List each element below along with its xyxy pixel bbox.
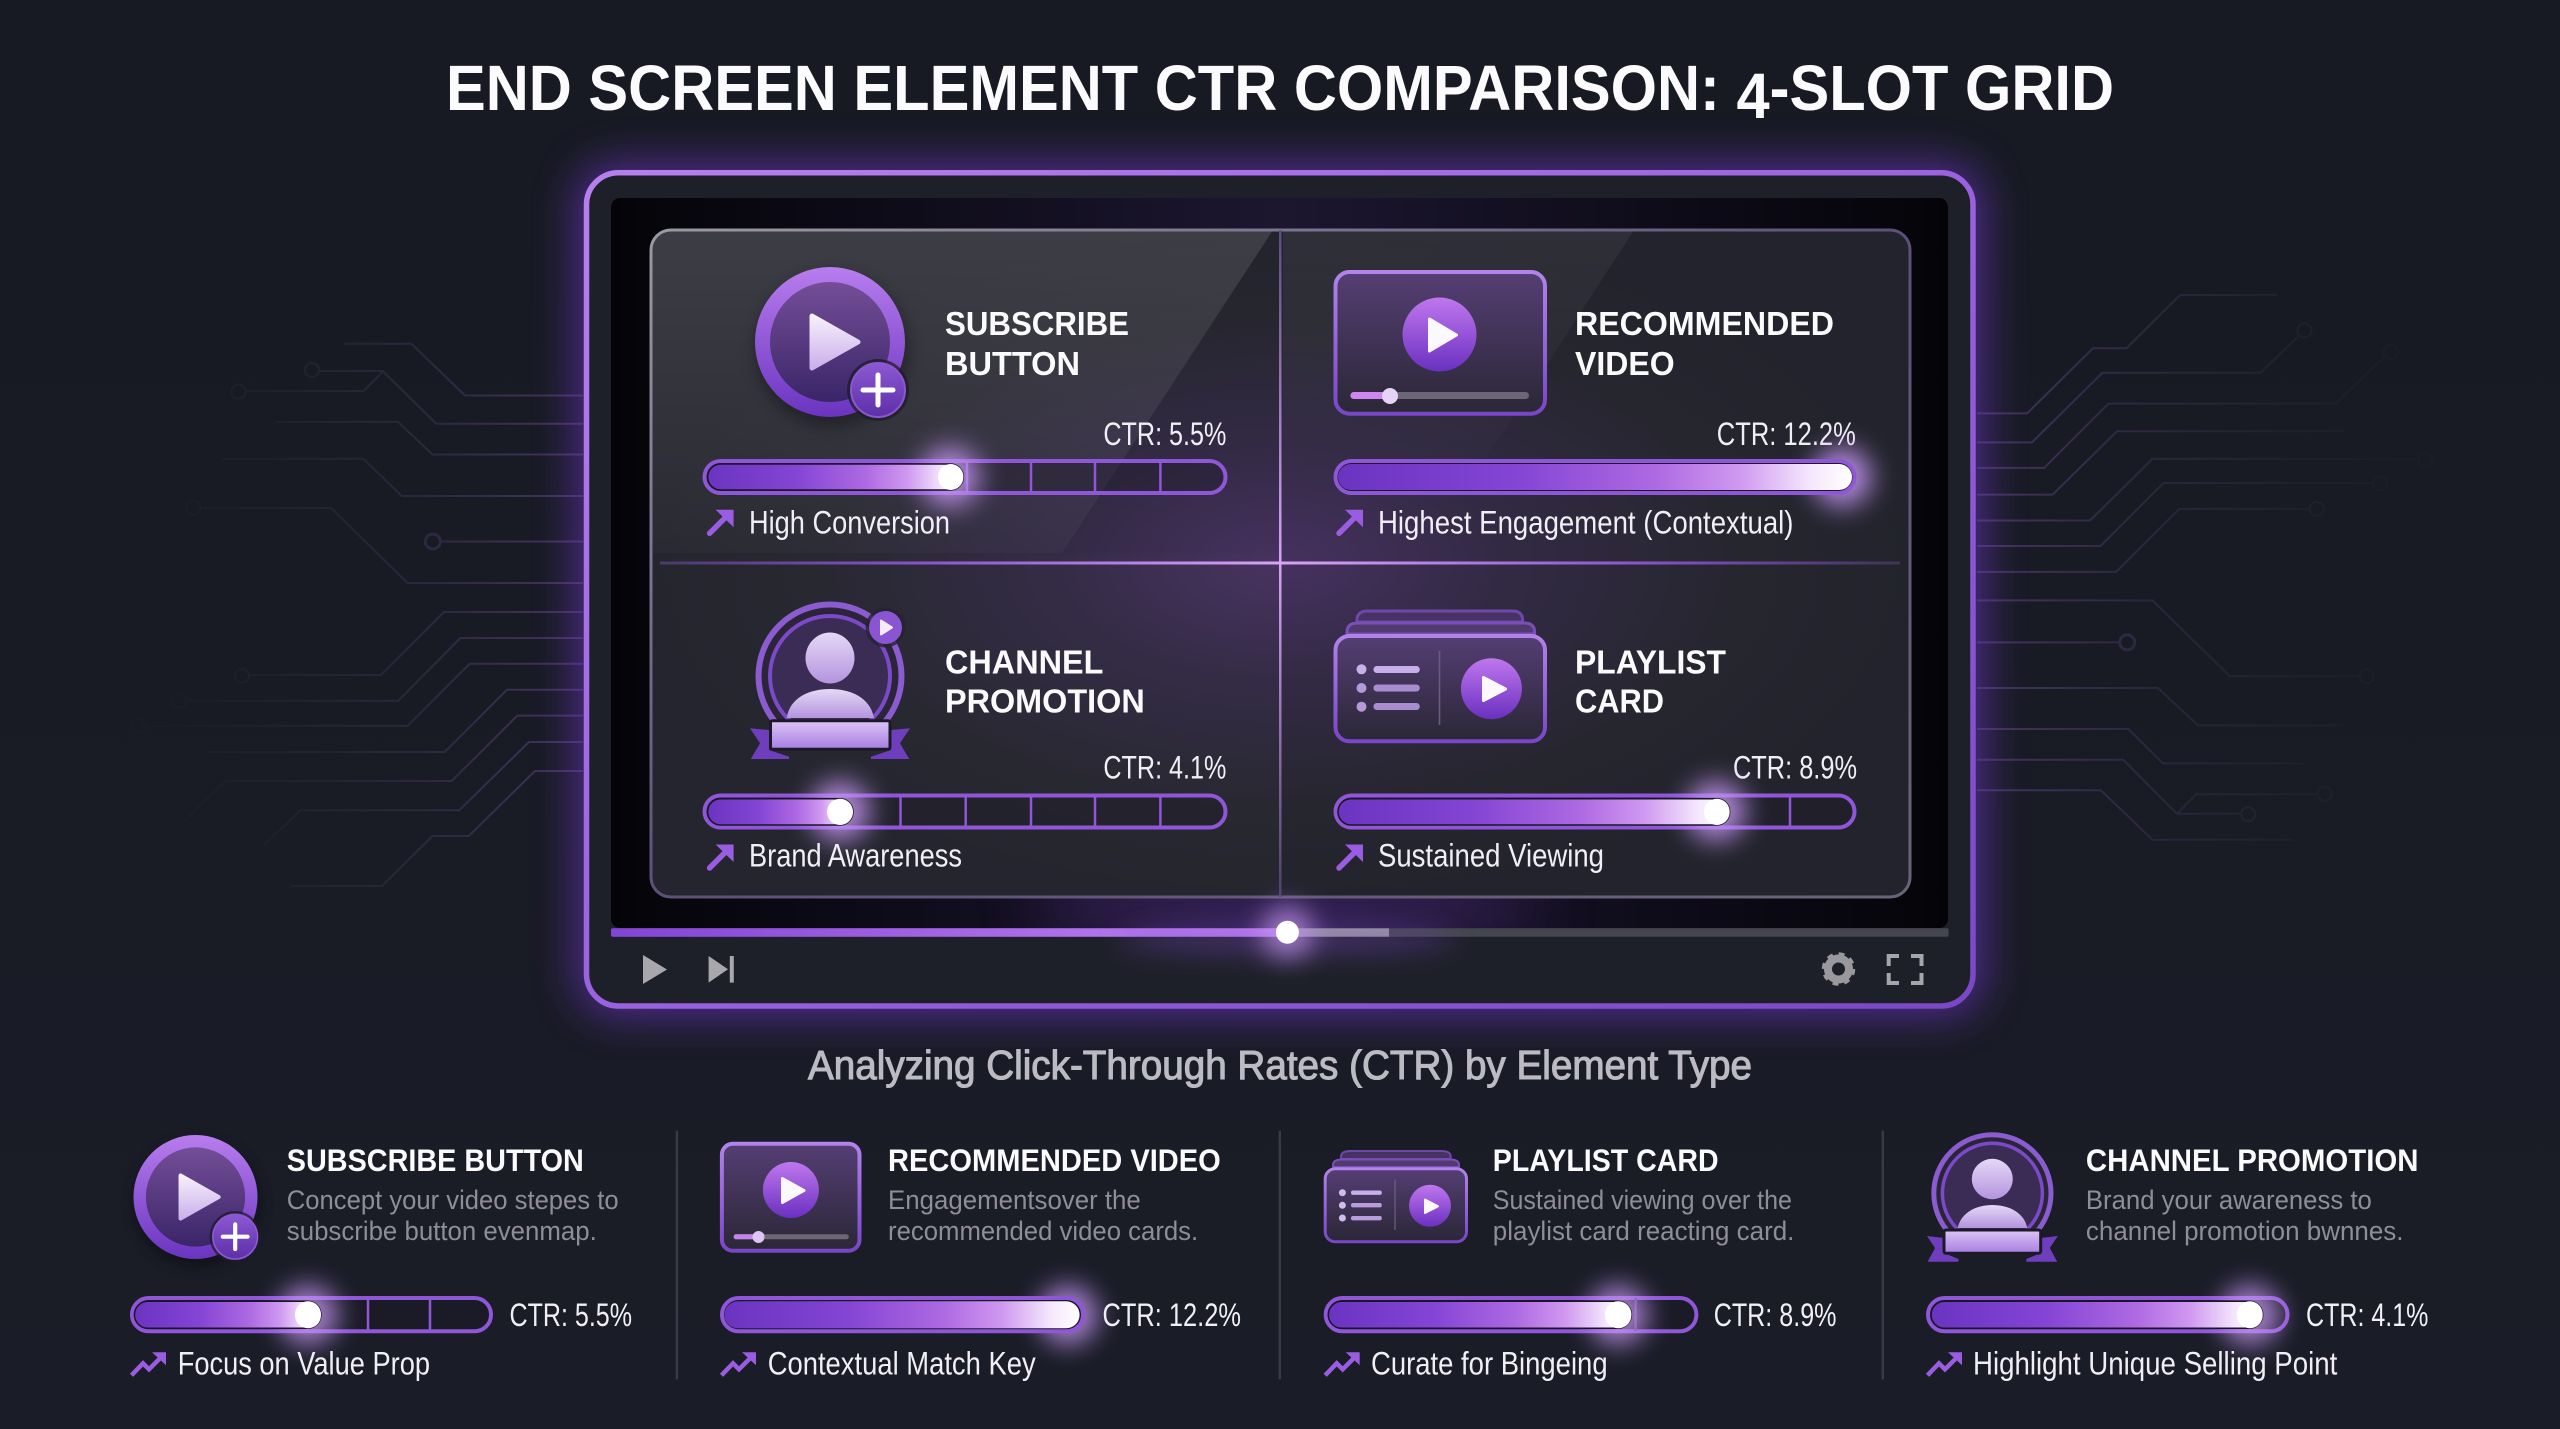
progress bar: [704, 781, 1226, 841]
icon: trend arrow: [132, 1352, 166, 1375]
description: recommended video cards.: [888, 1216, 1198, 1246]
icon: arrow up: [710, 510, 734, 533]
description: Brand your awareness to: [2086, 1185, 2372, 1215]
icon: arrow up: [1339, 510, 1363, 533]
icon: trend arrow: [722, 1352, 756, 1375]
title: -SLOT GRID: [1770, 52, 2114, 124]
progress bar: [1326, 1285, 1696, 1345]
heading: playlist card: CARD: [1575, 684, 1664, 721]
icon: next control: [709, 956, 734, 983]
label: Brand Awareness: [749, 838, 962, 874]
column: subscribe button: [132, 1135, 632, 1381]
icon: trend arrow: [1325, 1352, 1360, 1375]
description: Sustained viewing over the: [1493, 1185, 1792, 1215]
heading: playlist card: [1575, 644, 1726, 721]
heading: playlist card: PLAYLIST: [1575, 644, 1726, 681]
label: High Conversion: [749, 504, 950, 540]
tip: Curate for Bingeing: [1371, 1345, 1608, 1381]
video screen: [611, 198, 1948, 945]
description: playlist card reacting card.: [1493, 1216, 1794, 1246]
column: recommended video: [722, 1142, 1241, 1381]
icon: channel promotion: [1927, 1135, 2058, 1262]
heading: channel promotion: [945, 644, 1145, 721]
tip: Highlight Unique Selling Point: [1973, 1345, 2337, 1381]
column: playlist card: [1325, 1142, 1836, 1381]
icon: trend arrow: [1928, 1352, 1962, 1375]
ctr value: CTR: 12.2%: [1102, 1297, 1241, 1333]
ctr value: CTR: 8.9%: [1733, 749, 1857, 785]
label: Highest Engagement (Contextual): [1378, 504, 1794, 540]
icon: channel avatar badge: [750, 604, 910, 759]
description: subscribe button evenmap.: [287, 1216, 597, 1246]
tip: Contextual Match Key: [768, 1345, 1036, 1381]
heading: CHANNEL PROMOTION: [2086, 1142, 2418, 1178]
description: Concept your video stepes to: [287, 1185, 619, 1215]
ctr value: CTR: 12.2%: [1717, 416, 1856, 452]
heading: channel promotion: PROMOTION: [945, 684, 1145, 721]
end screen grid panel: [651, 230, 1910, 897]
ctr value: CTR: 4.1%: [2306, 1297, 2428, 1333]
icon: playlist card stack: [1336, 611, 1545, 741]
progress bar: [704, 447, 1226, 507]
icon: video thumbnail: [1336, 272, 1545, 414]
frame glow: [578, 164, 1982, 1014]
description: [1493, 1185, 1794, 1246]
icon: settings gear: [1824, 954, 1853, 984]
label: Sustained Viewing: [1378, 838, 1604, 874]
heading: channel promotion: CHANNEL: [945, 644, 1103, 681]
description: [287, 1185, 619, 1246]
seek bar: [611, 906, 1949, 958]
video player frame: [586, 173, 1973, 1006]
ctr value: CTR: 5.5%: [510, 1297, 632, 1333]
tip: Focus on Value Prop: [178, 1345, 430, 1381]
description: [2086, 1185, 2404, 1246]
heading: SUBSCRIBE BUTTON: [287, 1142, 584, 1178]
ctr value: CTR: 4.1%: [1103, 749, 1226, 785]
slot: recommended video: [1336, 272, 1872, 540]
slot: channel promotion: [704, 604, 1226, 874]
ctr value: CTR: 5.5%: [1103, 416, 1226, 452]
ctr value: CTR: 8.9%: [1714, 1297, 1836, 1333]
slot: playlist card: [1336, 611, 1857, 874]
icon: recommended video: [722, 1144, 860, 1251]
icon: play control: [643, 955, 667, 984]
heading: subscribe button: [945, 306, 1129, 383]
slot: subscribe button: [704, 267, 1226, 540]
description: [888, 1185, 1198, 1246]
description: Engagementsover the: [888, 1185, 1141, 1215]
title: 4: [1736, 60, 1770, 132]
circuit traces right: [1977, 295, 2432, 840]
icon: arrow up: [710, 844, 734, 868]
subtitle: Analyzing Click-Through Rates (CTR) by Element Type: [808, 1042, 1752, 1088]
icon: arrow up: [1339, 844, 1363, 868]
heading: subscribe button: BUTTON: [945, 346, 1080, 383]
heading: recommended video: [1575, 306, 1834, 383]
progress bar: [132, 1285, 491, 1345]
progress bar: [722, 1285, 1098, 1345]
circuit traces left: [131, 344, 583, 886]
icon: fullscreen: [1889, 956, 1922, 983]
heading: recommended video: VIDEO: [1575, 346, 1675, 383]
icon: subscribe button: [133, 1135, 261, 1266]
progress bar: [1336, 447, 1872, 507]
heading: PLAYLIST CARD: [1493, 1142, 1719, 1178]
progress bar: [1336, 781, 1854, 841]
heading: subscribe button: SUBSCRIBE: [945, 306, 1129, 343]
column: channel promotion: [1927, 1135, 2428, 1381]
progress bar: [1928, 1285, 2288, 1345]
icon: subscribe play button with plus: [755, 267, 909, 426]
icon: playlist card: [1325, 1151, 1466, 1242]
heading: RECOMMENDED VIDEO: [888, 1142, 1221, 1178]
heading: recommended video: RECOMMENDED: [1575, 306, 1834, 343]
description: channel promotion bwnnes.: [2086, 1216, 2404, 1246]
title: END SCREEN ELEMENT CTR COMPARISON:: [446, 52, 1814, 124]
